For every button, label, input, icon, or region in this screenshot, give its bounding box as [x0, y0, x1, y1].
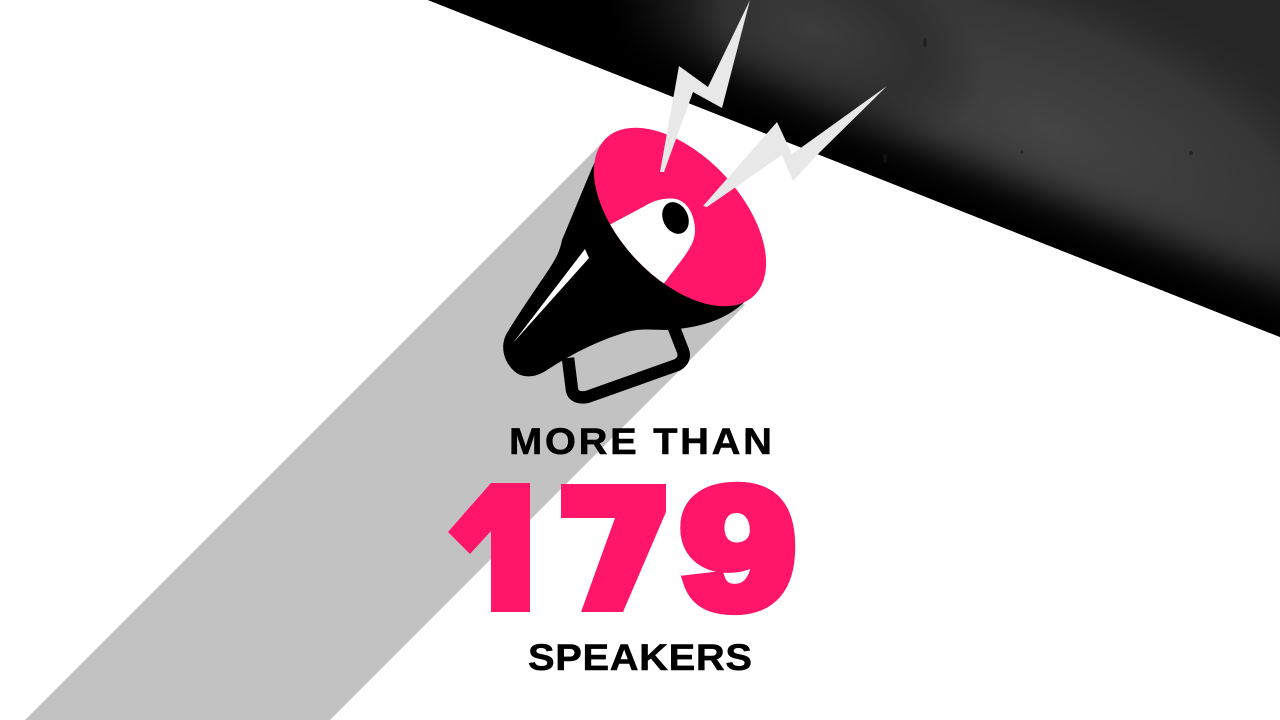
megaphone handle [568, 328, 684, 397]
speaker hole [657, 198, 694, 238]
dark diagonal band [428, 0, 1280, 337]
megaphone cast shadow [25, 145, 745, 720]
icon: megaphone [503, 128, 766, 404]
megaphone body [503, 143, 750, 376]
big number 179 [448, 482, 796, 616]
big number 179: 1 [448, 454, 563, 646]
label: speakers: SPEAKERS [528, 637, 752, 679]
icon: lightning bolt 1 [660, 0, 750, 172]
heading: more than: MORE THAN [509, 421, 772, 463]
megaphone bell opening [562, 96, 798, 338]
big number 179: 7 [561, 454, 677, 646]
big number 179: 9 [681, 454, 795, 644]
bell inner white cone [610, 198, 695, 284]
body highlight [513, 249, 589, 343]
icon: lightning bolt 2 [703, 86, 887, 207]
